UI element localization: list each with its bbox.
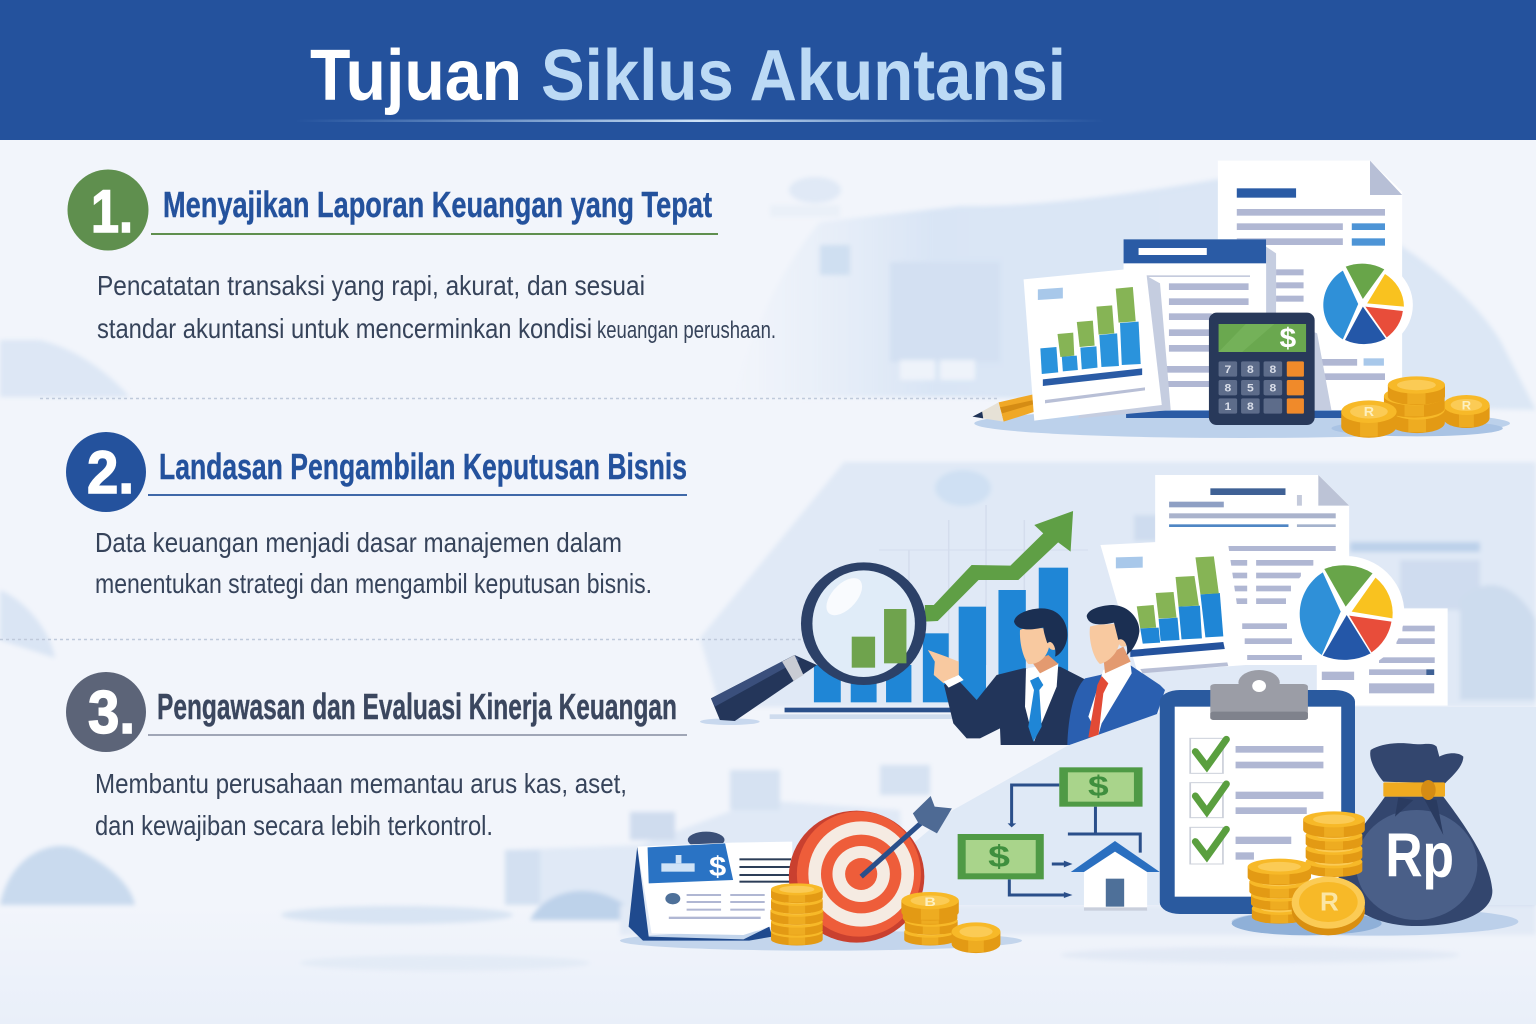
heading underline 3: [148, 734, 687, 736]
body text 1: [97, 270, 776, 344]
back document: [1155, 475, 1349, 665]
calculator: 8: [1247, 363, 1254, 376]
dashed separators: [0, 398, 1000, 640]
coins: R: [1364, 403, 1374, 419]
business people: [944, 605, 1165, 745]
ground shadow: [1232, 908, 1518, 936]
background scenery: [0, 175, 1536, 971]
clipboard with checklist: [1160, 670, 1355, 914]
coin stacks near money bag: [1248, 811, 1365, 935]
chart paper: [1024, 267, 1171, 421]
body text 1: standar akuntansi untuk mencerminkan kondisi: [97, 313, 592, 344]
banknote top: [1059, 767, 1143, 807]
title: Tujuan: [310, 36, 522, 116]
pointing hand: [928, 650, 959, 683]
coin stacks near money bag: R: [1320, 887, 1339, 917]
businessman in navy suit: [944, 608, 1085, 745]
calculator: 8: [1269, 363, 1277, 376]
body text 3: Membantu perusahaan memantau arus kas, aset,: [95, 768, 627, 799]
pencil: [972, 394, 1035, 422]
calculator: 8: [1247, 400, 1254, 413]
heading 3: Pengawasan dan Evaluasi Kinerja Keuangan: [157, 686, 677, 727]
illustration: money bag and coins: [1232, 743, 1518, 936]
cash flow diagram: [958, 767, 1160, 911]
banknote left: $: [988, 840, 1010, 874]
illustration: targets, cash flow, checklist: [620, 670, 1355, 953]
chart grid: [879, 505, 1088, 665]
ground shadow: [620, 931, 1022, 951]
body text 2: [95, 527, 652, 599]
calculator: 8: [1269, 382, 1277, 395]
body text 1: Pencatatan transaksi yang rapi, akurat, dan sesuai: [97, 270, 645, 301]
body text 3: [95, 768, 627, 841]
money bag: Rp: [1385, 822, 1454, 891]
calculator: 8: [1224, 382, 1232, 395]
section 1: [68, 170, 776, 344]
title: Siklus Akuntansi: [541, 36, 1066, 116]
illustration: growth chart, magnifier, documents: [700, 475, 1448, 725]
calculator: 7: [1224, 363, 1232, 376]
house: [1071, 841, 1160, 911]
coins: [1331, 376, 1503, 438]
section 3: [66, 672, 687, 841]
calendar card: [629, 832, 792, 941]
floor gradient: [0, 905, 1536, 1024]
coin stacks near target: [770, 883, 1000, 953]
pie chart: [1287, 556, 1404, 671]
banknote left: [958, 834, 1044, 879]
target with dart: [789, 796, 952, 943]
coin stacks near target: B: [924, 895, 936, 909]
body text 2: menentukan strategi dan mengambil keputusan bisnis.: [95, 568, 652, 599]
heading underline 2: [148, 494, 687, 496]
calculator: [1209, 313, 1315, 425]
number badge 1: [68, 170, 148, 250]
number badge 2: [66, 432, 146, 512]
header band: [0, 0, 1536, 140]
number badge 1: 1.: [91, 178, 133, 245]
money bag: [1339, 743, 1492, 926]
pie chart: [1314, 259, 1413, 351]
blue-header document: [1124, 239, 1349, 418]
diagonal backdrop panel: [840, 707, 1536, 905]
number badge 3: 3.: [88, 679, 135, 746]
illustration: financial reports, calculator, coins: [972, 161, 1510, 438]
ground shadow: [974, 409, 1510, 438]
growth arrow: [925, 511, 1073, 622]
right document: [1317, 608, 1448, 706]
section 2: [66, 432, 687, 599]
calculator: $: [1280, 323, 1296, 354]
number badge 3: [66, 672, 146, 752]
body text 3: dan kewajiban secara lebih terkontrol.: [95, 810, 493, 841]
businessman in blue suit: [1067, 605, 1165, 745]
bar chart: [770, 568, 1068, 719]
coins: R: [1462, 399, 1471, 412]
large report document: [1218, 161, 1402, 410]
calculator: 1: [1224, 400, 1232, 413]
heading 2: Landasan Pengambilan Keputusan Bisnis: [159, 446, 687, 487]
banknote top: $: [1088, 770, 1109, 802]
body text 1: keuangan perushaan.: [597, 317, 776, 344]
magnifying glass: [700, 562, 926, 725]
chart paper: [1100, 538, 1246, 673]
heading underline 1: [151, 233, 718, 235]
body text 2: Data keuangan menjadi dasar manajemen dalam: [95, 527, 622, 558]
number badge 2: 2.: [87, 439, 134, 506]
calculator: 5: [1247, 382, 1254, 395]
calendar card: $: [709, 851, 726, 882]
heading 1: Menyajikan Laporan Keuangan yang Tepat: [163, 184, 712, 225]
